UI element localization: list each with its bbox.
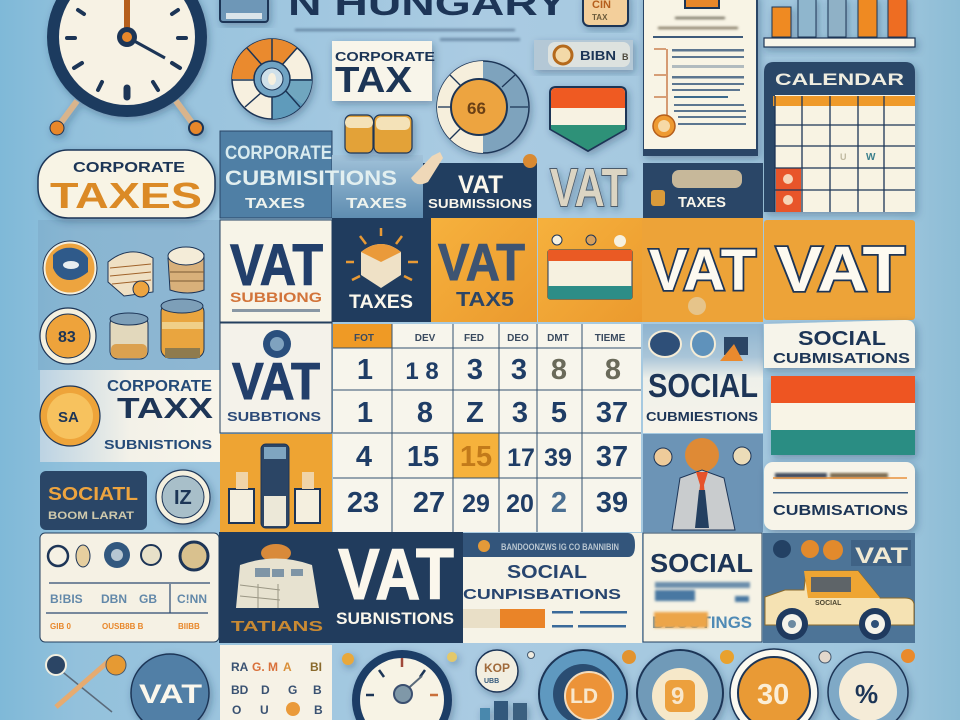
calendar: main grid: 2 bbox=[551, 487, 567, 519]
panel: social cunpisbations: SOCIAL bbox=[507, 562, 587, 582]
card: VAT submissions cream: SUBBIONG bbox=[230, 289, 322, 305]
card: VAT submissions cream: VAT bbox=[230, 233, 323, 298]
panel: VAT white on orange: VAT bbox=[649, 238, 756, 303]
panel: icons table cream: GB bbox=[139, 592, 157, 606]
panel: icons table cream: C!NN bbox=[177, 592, 207, 606]
icon group: coins and stacks bbox=[43, 241, 204, 297]
panel: car and VAT bbox=[763, 533, 915, 643]
panel: taxations stack bbox=[219, 532, 332, 643]
calendar: main grid: DMT bbox=[547, 333, 569, 344]
document bbox=[643, 0, 758, 156]
card: VAT submissions 2 bbox=[220, 323, 332, 433]
icon: round badge 9 bbox=[637, 650, 723, 720]
calendar: main grid: 5 bbox=[551, 397, 567, 429]
icon: round badge LD: LD bbox=[570, 685, 598, 708]
card: cubmisations: CUBMISATIONS bbox=[773, 502, 908, 519]
band: corporate submissions taxes: TAXES bbox=[245, 195, 305, 212]
icon: round badge runner: % bbox=[855, 679, 878, 709]
calendar: main grid: 1 bbox=[357, 354, 373, 386]
calendar: main grid: 1 8 bbox=[405, 358, 439, 385]
table: cream lower bbox=[220, 645, 332, 720]
card: corporate tax: TAX bbox=[335, 59, 412, 100]
panel: VAT white large on orange bbox=[764, 220, 915, 320]
panel: phones on orange bbox=[220, 434, 332, 532]
panel: corporate taxx submissions: SUBNISTIONS bbox=[104, 437, 212, 452]
label: social navy bbox=[40, 471, 147, 530]
icon: badge coin bbox=[156, 470, 210, 524]
card: social cubmisations: CUBMISATIONS bbox=[773, 350, 910, 367]
icon: alarm clock bbox=[47, 0, 207, 135]
panel: taxes with sun face: TAXES bbox=[349, 292, 413, 313]
calendar top right: CALENDAR bbox=[775, 70, 904, 89]
panel: VAT taxes orange bbox=[431, 218, 537, 322]
calendar: main grid: 3 bbox=[467, 354, 483, 386]
calendar: main grid: 37 bbox=[596, 397, 628, 429]
table: cream lower: A bbox=[283, 660, 292, 674]
panel: VAT submissions big bbox=[332, 532, 463, 643]
calendar: main grid: 39 bbox=[544, 444, 572, 472]
card: corporate tax: CORPORATE bbox=[335, 49, 435, 64]
calendar: main grid: FOT bbox=[354, 333, 374, 344]
panel: icons table cream: BIIBB bbox=[178, 622, 200, 631]
table: cream lower: BI bbox=[310, 660, 322, 674]
calendar: main grid: TIEME bbox=[595, 333, 626, 344]
icon: crossed tools bbox=[46, 655, 126, 712]
caption under title bbox=[295, 29, 520, 41]
embossed VAT: VAT bbox=[550, 158, 627, 218]
panel: flag on orange bbox=[538, 218, 642, 322]
panel: car and VAT: VAT bbox=[855, 543, 909, 568]
panel: VAT submissions navy: SUBMISSIONS bbox=[428, 196, 532, 211]
table: cream lower: G. M bbox=[252, 660, 278, 674]
calendar: main grid: 15 bbox=[407, 441, 439, 473]
calendar top right bbox=[764, 62, 915, 212]
icon: tax dial: 66 bbox=[467, 99, 486, 118]
calendar: main grid: 27 bbox=[413, 487, 445, 519]
calendar: main grid: DEO bbox=[507, 333, 529, 344]
small badge top bbox=[220, 0, 268, 22]
table: cream lower: BD bbox=[231, 683, 249, 697]
calendar: main grid bbox=[333, 324, 641, 532]
panel: taxes navy: TAXES bbox=[678, 194, 726, 211]
card: social with chart text: SOCIAL bbox=[650, 548, 753, 578]
calendar: main grid: 8 bbox=[605, 354, 621, 386]
icon: pill label: BIBN bbox=[580, 48, 616, 63]
icon group: lower coin and cylinders bbox=[40, 299, 204, 364]
table: cream lower: RA bbox=[231, 660, 249, 674]
icon: pill label: B bbox=[622, 52, 629, 62]
calendar: main grid: 20 bbox=[506, 490, 534, 518]
card: cubmisations bbox=[764, 462, 915, 530]
icon: flag shield bbox=[550, 87, 626, 151]
panel: corporate taxx submissions: TAXX bbox=[117, 393, 214, 425]
table: cream lower: U bbox=[260, 703, 269, 717]
band: corporate submissions taxes: TAXES bbox=[346, 195, 407, 212]
calendar: main grid: 23 bbox=[347, 487, 379, 519]
calendar: main grid: 17 bbox=[507, 444, 535, 472]
panel: VAT submissions navy: VAT bbox=[458, 171, 503, 199]
panel: taxations stack: TATIANS bbox=[231, 618, 323, 635]
bar chart on shelf bbox=[764, 0, 915, 47]
icon: round badge 30: 30 bbox=[757, 679, 789, 711]
table: cream lower: D bbox=[261, 683, 270, 697]
icon group: lower coin and cylinders: 83 bbox=[58, 329, 76, 346]
card: VAT submissions 2: VAT bbox=[232, 353, 320, 411]
pill: corporate taxes: CORPORATE bbox=[73, 159, 185, 176]
background shade behind icons bbox=[38, 220, 220, 370]
panel: icons table cream: B!BIS bbox=[50, 592, 83, 606]
card: social with chart text: BBUUTINGS bbox=[652, 613, 752, 632]
panel: corporate taxx submissions: CORPORATE bbox=[107, 378, 212, 395]
panel: VAT white large on orange: VAT bbox=[776, 233, 905, 305]
card: social cubmisations bbox=[764, 320, 915, 368]
card: VAT submissions 2: SUBBTIONS bbox=[227, 409, 321, 424]
table: cream lower: B bbox=[313, 683, 322, 697]
calendar: main grid: 8 bbox=[417, 397, 433, 429]
panel: VAT taxes orange: VAT bbox=[438, 234, 525, 292]
panel: taxes navy bbox=[643, 163, 763, 218]
icon: pie wheel bbox=[232, 39, 312, 119]
panel: social submissions with icons: SOCIAL bbox=[648, 367, 758, 404]
calendar: main grid: 3 bbox=[511, 354, 527, 386]
panel: VAT submissions big: VAT bbox=[338, 535, 454, 615]
orange badge top: TAX bbox=[592, 13, 608, 22]
panel: social submissions with icons: CUBMIESTIONS bbox=[646, 409, 758, 424]
table: cream lower: G bbox=[288, 683, 297, 697]
icon: round badge LD bbox=[539, 650, 627, 720]
panel: social cunpisbations: CUNPISBATIONS bbox=[463, 586, 621, 603]
bottom small seal with bars: KOP bbox=[484, 661, 510, 675]
panel: taxes with sun face bbox=[332, 218, 431, 322]
calendar: main grid: 4 bbox=[356, 441, 372, 473]
panel: corporate taxx submissions bbox=[40, 370, 220, 462]
calendar: main grid: 39 bbox=[596, 487, 628, 519]
table: cream lower: B bbox=[314, 703, 323, 717]
calendar: main grid: FED bbox=[464, 333, 484, 344]
calendar: main grid: 29 bbox=[462, 490, 490, 518]
panel: icons table cream: GIB 0 bbox=[50, 622, 71, 631]
icon: orange drums bbox=[345, 115, 412, 153]
table: cream lower: O bbox=[232, 703, 241, 717]
icon: tax dial bbox=[437, 61, 529, 153]
pill: corporate taxes: TAXES bbox=[50, 175, 202, 216]
calendar top right: U bbox=[840, 152, 846, 162]
panel: social submissions with icons bbox=[643, 324, 763, 433]
band: corporate submissions taxes: CUBMISITIONS bbox=[225, 167, 397, 190]
calendar: main grid: 1 bbox=[357, 397, 373, 429]
card: corporate tax bbox=[332, 41, 435, 101]
panel: corporate taxx submissions: SA bbox=[58, 409, 79, 426]
panel: icons table cream: OUSB8B B bbox=[102, 622, 144, 631]
bottom small seal with bars: UBB bbox=[484, 678, 499, 685]
icon: Hungarian flag bbox=[771, 376, 915, 455]
icon: badge coin: IZ bbox=[174, 487, 192, 509]
panel: VAT submissions big: SUBNISTIONS bbox=[336, 609, 454, 628]
orange badge top bbox=[583, 0, 628, 26]
panel: social cunpisbations: BANDOONZWS IG CO BANNIBIN bbox=[501, 542, 619, 552]
calendar: main grid: 3 bbox=[512, 397, 528, 429]
label: social navy: BOOM LARAT bbox=[48, 510, 134, 522]
card: social cubmisations: SOCIAL bbox=[798, 328, 886, 350]
card: VAT submissions cream bbox=[220, 220, 332, 322]
panel: icons table cream bbox=[40, 533, 219, 642]
panel: VAT taxes orange: TAX5 bbox=[456, 289, 514, 311]
icon: VAT circle bbox=[131, 654, 209, 720]
icon: VAT circle: VAT bbox=[139, 679, 203, 709]
calendar: main grid: 37 bbox=[596, 441, 628, 473]
panel: VAT white on orange bbox=[642, 218, 763, 322]
calendar: main grid: 15 bbox=[460, 441, 492, 473]
icon: round badge 30 bbox=[730, 649, 818, 720]
icon: round badge 9: 9 bbox=[671, 683, 684, 710]
bottom small seal with bars bbox=[476, 650, 527, 720]
calendar: main grid: Z bbox=[466, 397, 484, 429]
panel: social cunpisbations bbox=[463, 533, 642, 643]
small dots row bbox=[528, 649, 915, 664]
band: corporate submissions taxes: CORPORATE bbox=[225, 143, 332, 164]
calendar top right: W bbox=[866, 152, 876, 163]
card: social with chart text bbox=[643, 533, 762, 642]
band: corporate submissions taxes bbox=[220, 131, 423, 218]
panel: icons table cream: DBN bbox=[101, 592, 127, 606]
pill: corporate taxes bbox=[38, 150, 215, 218]
label: social navy: SOCIATL bbox=[48, 484, 138, 504]
panel: businessman bbox=[643, 434, 763, 532]
panel: car and VAT: SOCIAL bbox=[815, 600, 842, 607]
icon: round badge runner bbox=[828, 652, 908, 720]
calendar: main grid: DEV bbox=[415, 333, 436, 344]
calendar: main grid: 8 bbox=[551, 354, 567, 386]
panel: VAT submissions navy bbox=[411, 152, 537, 218]
icon: pill label bbox=[534, 40, 633, 70]
icon: bottom gauge bbox=[342, 650, 457, 720]
